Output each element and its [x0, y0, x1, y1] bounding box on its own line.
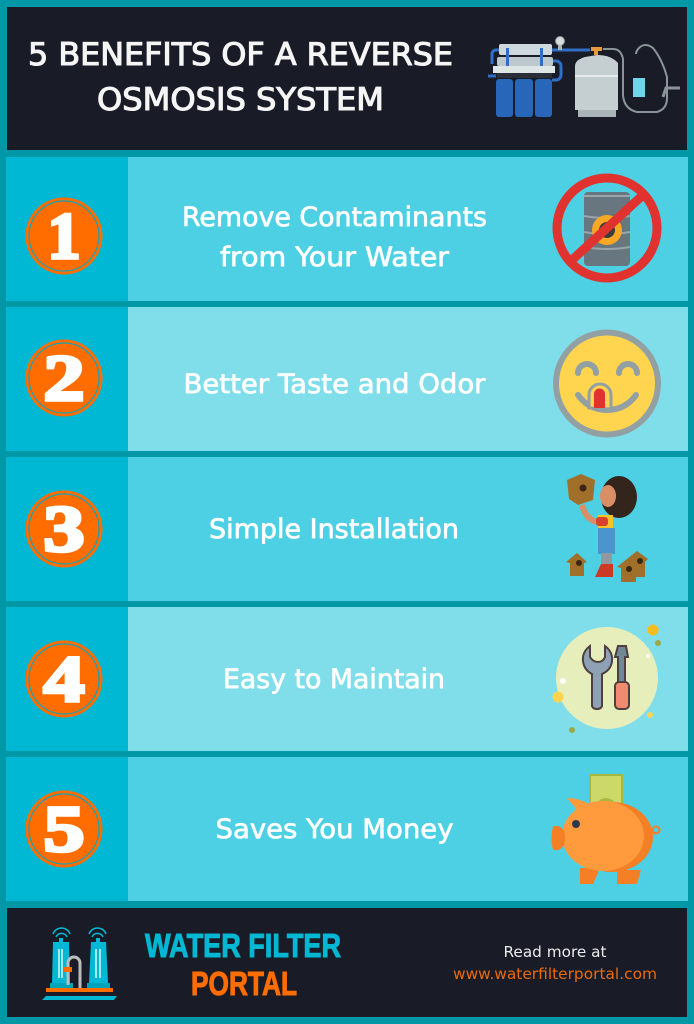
panel: benefit 5 — [6, 757, 688, 901]
icon: water filter logo — [42, 928, 117, 1000]
panel: benefit 1 — [6, 157, 688, 301]
heading 1: from Your Water — [220, 242, 450, 273]
number badge 3: 3 — [44, 493, 84, 566]
icon: reverse osmosis system — [488, 36, 680, 117]
number badge 4 — [26, 640, 102, 718]
number badge 1 — [26, 198, 102, 274]
title — [28, 37, 453, 118]
read more text: Read more at — [504, 943, 607, 961]
icon: tasty face — [556, 332, 658, 434]
panel: benefit 4 — [6, 607, 688, 751]
heading 3: Simple Installation — [209, 514, 459, 545]
number badge 1: 1 — [48, 200, 80, 273]
heading 1: Remove Contaminants — [182, 202, 487, 233]
number badge 5 — [26, 790, 102, 868]
title: 5 BENEFITS OF A REVERSE — [28, 37, 453, 73]
heading 5: Saves You Money — [216, 814, 454, 845]
logo wordmark — [145, 927, 341, 1002]
heading 4: Easy to Maintain — [223, 664, 445, 695]
icon: piggy bank — [552, 775, 660, 884]
panel: benefit 2 — [6, 307, 688, 451]
number badge 2: 2 — [44, 342, 84, 415]
logo wordmark: WATER FILTER — [145, 927, 341, 964]
footer panel — [7, 908, 687, 1017]
icon: child with birdhouses — [566, 474, 648, 582]
number badge 3 — [26, 490, 102, 568]
icon: tools — [552, 624, 661, 733]
heading 1 — [182, 202, 487, 273]
number badge 2 — [26, 340, 102, 416]
header panel — [7, 7, 687, 150]
title: OSMOSIS SYSTEM — [97, 82, 384, 118]
number badge 5: 5 — [44, 793, 84, 866]
website url: www.waterfilterportal.com — [453, 965, 657, 983]
panel: benefit 3 — [6, 457, 688, 601]
logo wordmark: PORTAL — [191, 965, 297, 1002]
icon: no toxic barrel — [557, 178, 657, 278]
heading 2: Better Taste and Odor — [184, 369, 486, 400]
number badge 4: 4 — [44, 643, 84, 716]
